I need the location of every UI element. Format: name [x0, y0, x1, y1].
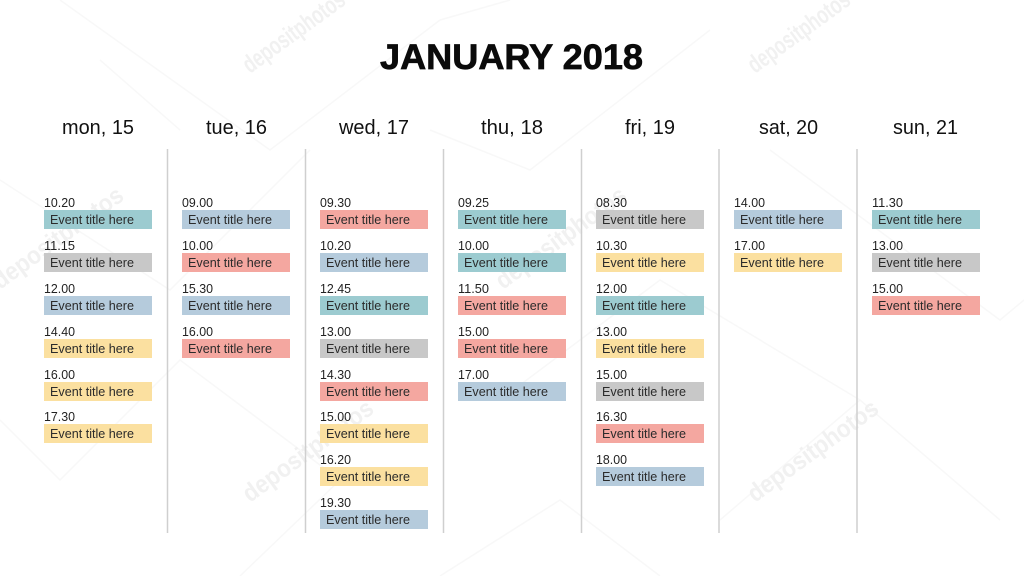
heading: tue, 16: tue, 16: [206, 117, 267, 139]
event 12.00: Event title here: [602, 298, 686, 313]
event 11.30: Event title here: [878, 212, 962, 227]
event 15.00: [596, 367, 704, 401]
event 12.45: Event title here: [326, 298, 410, 313]
event 10.20: [44, 195, 152, 229]
event 16.30: [596, 409, 704, 443]
event 18.00: [596, 452, 704, 486]
event 08.30: [596, 195, 704, 229]
text: depositphotos: [742, 394, 884, 508]
event 17.00: Event title here: [464, 384, 548, 399]
event 16.30: 16.30: [596, 409, 627, 424]
panel: sunday: [872, 117, 980, 315]
event 10.00: [182, 238, 290, 272]
event 17.00: 17.00: [734, 238, 765, 253]
event 16.00: Event title here: [50, 384, 134, 399]
event 19.30: [320, 495, 428, 529]
event 09.25: Event title here: [464, 212, 548, 227]
event 13.00: 13.00: [320, 324, 351, 339]
event 15.00: 15.00: [320, 409, 351, 424]
event 18.00: 18.00: [596, 452, 627, 467]
event 17.00: Event title here: [740, 255, 824, 270]
event 13.00: 13.00: [872, 238, 903, 253]
event 14.00: [734, 195, 842, 229]
panel: thursday: [458, 117, 566, 401]
event 13.00: [872, 238, 980, 272]
event 12.00: [596, 281, 704, 315]
event 15.00: [458, 324, 566, 358]
event 13.00: Event title here: [878, 255, 962, 270]
event 17.30: 17.30: [44, 409, 75, 424]
event 16.20: 16.20: [320, 452, 351, 467]
event 14.30: [320, 367, 428, 401]
event 16.00: 16.00: [182, 324, 213, 339]
event 14.00: 14.00: [734, 195, 765, 210]
event 10.20: 10.20: [44, 195, 75, 210]
event 15.30: Event title here: [188, 298, 272, 313]
event 11.50: 11.50: [458, 281, 489, 296]
event 10.00: 10.00: [458, 238, 489, 253]
event 15.00: Event title here: [878, 298, 962, 313]
event 12.00: [44, 281, 152, 315]
event 15.00: 15.00: [596, 367, 627, 382]
heading: fri, 19: fri, 19: [625, 117, 675, 139]
event 17.00: [734, 238, 842, 272]
event 16.30: Event title here: [602, 426, 686, 441]
event 16.00: Event title here: [188, 341, 272, 356]
panel: monday: [44, 117, 152, 443]
event 13.00: 13.00: [596, 324, 627, 339]
event 11.30: [872, 195, 980, 229]
event 16.20: [320, 452, 428, 486]
panel: wednesday: [320, 117, 428, 529]
event 13.00: Event title here: [602, 341, 686, 356]
event 09.00: Event title here: [188, 212, 272, 227]
event 12.00: 12.00: [596, 281, 627, 296]
panel: saturday: [734, 117, 842, 272]
event 12.00: 12.00: [44, 281, 75, 296]
event 09.00: 09.00: [182, 195, 213, 210]
event 11.15: 11.15: [44, 238, 75, 253]
event 10.20: 10.20: [320, 238, 351, 253]
heading: thu, 18: thu, 18: [481, 117, 543, 139]
event 17.30: [44, 409, 152, 443]
event 14.40: [44, 324, 152, 358]
event 18.00: Event title here: [602, 469, 686, 484]
event 12.45: [320, 281, 428, 315]
event 14.40: Event title here: [50, 341, 134, 356]
panel: friday: [596, 117, 704, 486]
event 15.30: [182, 281, 290, 315]
event 10.00: [458, 238, 566, 272]
event 17.30: Event title here: [50, 426, 134, 441]
event 15.30: 15.30: [182, 281, 213, 296]
event 14.30: Event title here: [326, 384, 410, 399]
event 16.00: [44, 367, 152, 401]
event 13.00: Event title here: [326, 341, 410, 356]
heading: sat, 20: sat, 20: [759, 117, 818, 139]
event 14.40: 14.40: [44, 324, 75, 339]
event 10.30: [596, 238, 704, 272]
event 10.20: Event title here: [326, 255, 410, 270]
event 15.00: 15.00: [458, 324, 489, 339]
event 09.30: Event title here: [326, 212, 410, 227]
event 13.00: [320, 324, 428, 358]
event 16.00: [182, 324, 290, 358]
event 19.30: 19.30: [320, 495, 351, 510]
event 15.00: [320, 409, 428, 443]
heading: wed, 17: wed, 17: [338, 117, 409, 139]
event 15.00: Event title here: [464, 341, 548, 356]
event 09.00: [182, 195, 290, 229]
event 11.15: [44, 238, 152, 272]
event 09.25: 09.25: [458, 195, 489, 210]
event 15.00: Event title here: [602, 384, 686, 399]
event 10.00: Event title here: [188, 255, 272, 270]
event 10.30: 10.30: [596, 238, 627, 253]
event 09.30: [320, 195, 428, 229]
event 11.30: 11.30: [872, 195, 903, 210]
event 14.30: 14.30: [320, 367, 351, 382]
event 12.00: Event title here: [50, 298, 134, 313]
event 11.50: Event title here: [464, 298, 548, 313]
event 13.00: [596, 324, 704, 358]
event 14.00: Event title here: [740, 212, 824, 227]
event 16.00: 16.00: [44, 367, 75, 382]
event 08.30: 08.30: [596, 195, 627, 210]
event 10.00: 10.00: [182, 238, 213, 253]
event 17.00: [458, 367, 566, 401]
event 16.20: Event title here: [326, 469, 410, 484]
heading: sun, 21: sun, 21: [893, 117, 958, 139]
event 11.15: Event title here: [50, 255, 134, 270]
event 12.45: 12.45: [320, 281, 351, 296]
event 09.30: 09.30: [320, 195, 351, 210]
event 17.00: 17.00: [458, 367, 489, 382]
event 10.20: [320, 238, 428, 272]
column dividers: [168, 149, 857, 533]
event 15.00: 15.00: [872, 281, 903, 296]
event 19.30: Event title here: [326, 512, 410, 527]
text: depositphotos: [490, 181, 632, 295]
event 08.30: Event title here: [602, 212, 686, 227]
event 10.00: Event title here: [464, 255, 548, 270]
event 15.00: Event title here: [326, 426, 410, 441]
event 15.00: [872, 281, 980, 315]
title: JANUARY 2018: [380, 38, 643, 77]
event 10.30: Event title here: [602, 255, 686, 270]
event 09.25: [458, 195, 566, 229]
text: depositphotos: [237, 394, 379, 508]
event 10.20: Event title here: [50, 212, 134, 227]
event 11.50: [458, 281, 566, 315]
panel: tuesday: [182, 117, 290, 358]
heading: mon, 15: mon, 15: [62, 117, 134, 139]
